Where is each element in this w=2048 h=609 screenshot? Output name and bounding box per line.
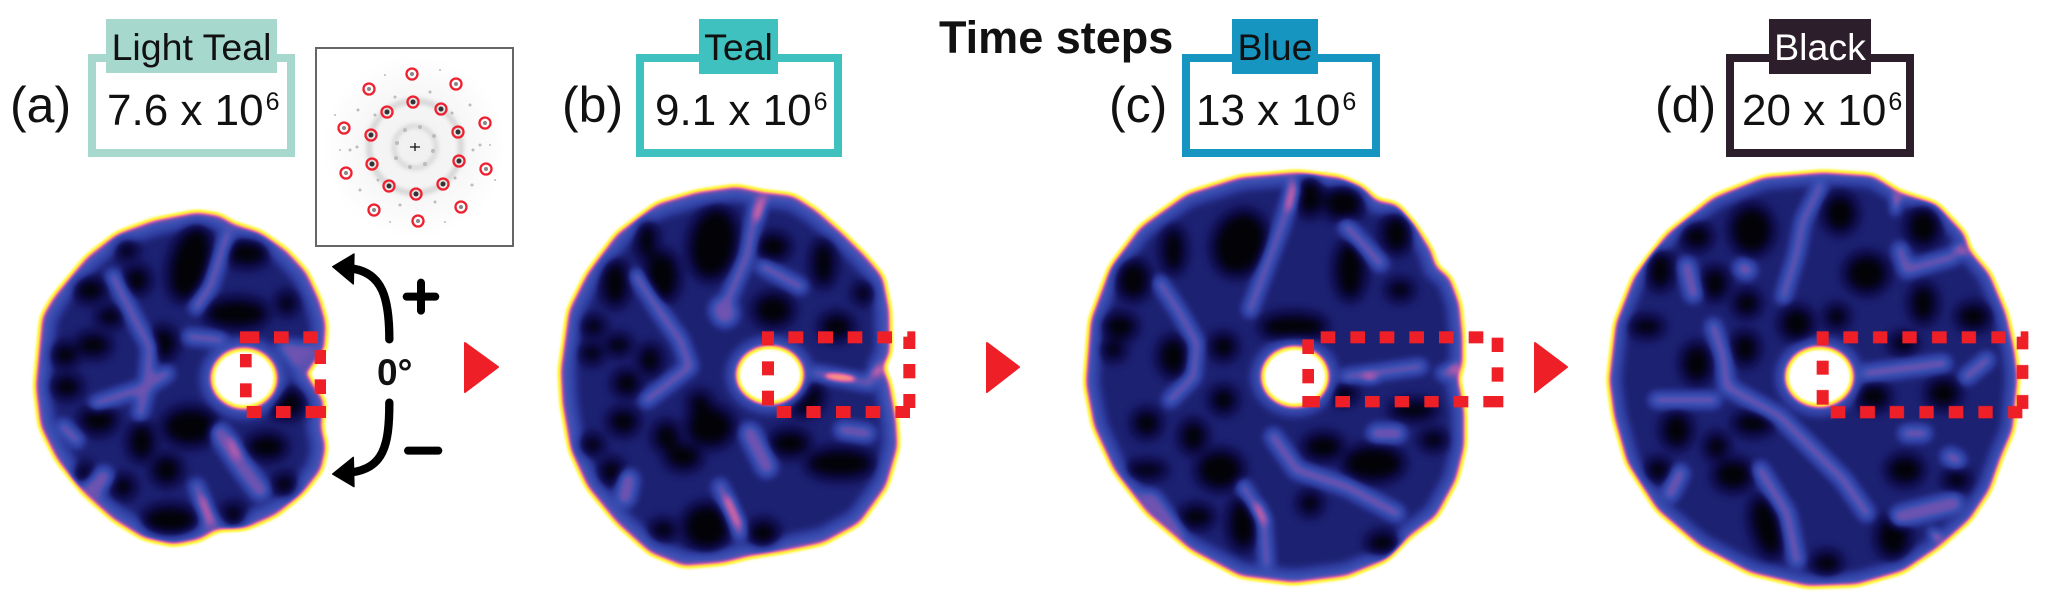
- value a: 7.6 x 10: [107, 86, 264, 135]
- tag: light teal: [106, 19, 277, 73]
- dotted selection box b: [762, 331, 915, 418]
- label (c): (c): [1109, 77, 1167, 133]
- value b: 9.1 x 10: [655, 86, 812, 135]
- tag text: Blue: [1237, 26, 1313, 68]
- inner spots: [368, 100, 462, 196]
- angle label: 0°: [377, 352, 412, 393]
- tomogram c: [1050, 137, 1503, 609]
- panel a label group: [10, 19, 291, 153]
- tag: blue: [1232, 19, 1318, 74]
- tomogram a: [0, 177, 363, 580]
- value d: 6: [1888, 88, 1902, 116]
- red selection circles: [338, 68, 492, 226]
- arrow: c to d: [1535, 343, 1567, 392]
- dotted selection box d: [1817, 331, 2028, 418]
- arrow: positive rotation: [333, 254, 389, 339]
- panel c label group: [1109, 19, 1376, 153]
- value d: 20 x 10: [1742, 86, 1886, 135]
- arrow: negative rotation: [333, 403, 389, 487]
- dotted selection box c: [1302, 331, 1503, 407]
- value c: 6: [1342, 88, 1356, 116]
- tag text: Light Teal: [112, 26, 271, 68]
- label (b): (b): [562, 77, 623, 133]
- title: time steps: Time steps: [939, 12, 1173, 63]
- arrow: b to c: [987, 343, 1019, 392]
- label (d): (d): [1655, 77, 1716, 133]
- label (a): (a): [10, 77, 71, 133]
- rotation arrows and angle labels: [333, 254, 438, 487]
- arrow: a to b: [465, 343, 498, 392]
- inset: diffraction pattern: [316, 48, 513, 246]
- value b: 6: [814, 88, 827, 116]
- density map a: [0, 177, 363, 580]
- icon: plus: [407, 283, 435, 311]
- value a: 6: [266, 88, 279, 116]
- tag: teal: [699, 19, 778, 74]
- tomogram b: [523, 150, 933, 603]
- density map d: [1575, 137, 2048, 609]
- box: blue: [1186, 58, 1376, 153]
- dotted selection box a: [240, 331, 326, 418]
- panel d label group: [1655, 19, 1910, 153]
- density map b: [523, 150, 933, 603]
- density map c: [1050, 137, 1500, 609]
- tag text: Black: [1774, 26, 1866, 68]
- panel b label group: [562, 19, 838, 153]
- tag text: Teal: [704, 26, 773, 68]
- outer spots: [342, 72, 488, 223]
- tomogram d: [1575, 137, 2048, 609]
- box: black: [1730, 58, 1910, 153]
- value c: 13 x 10: [1196, 86, 1340, 135]
- icon: minus: [408, 439, 438, 463]
- tag: black: [1769, 19, 1871, 74]
- center cross: [410, 143, 420, 151]
- box: teal: [640, 58, 838, 153]
- box: light teal: [92, 58, 291, 153]
